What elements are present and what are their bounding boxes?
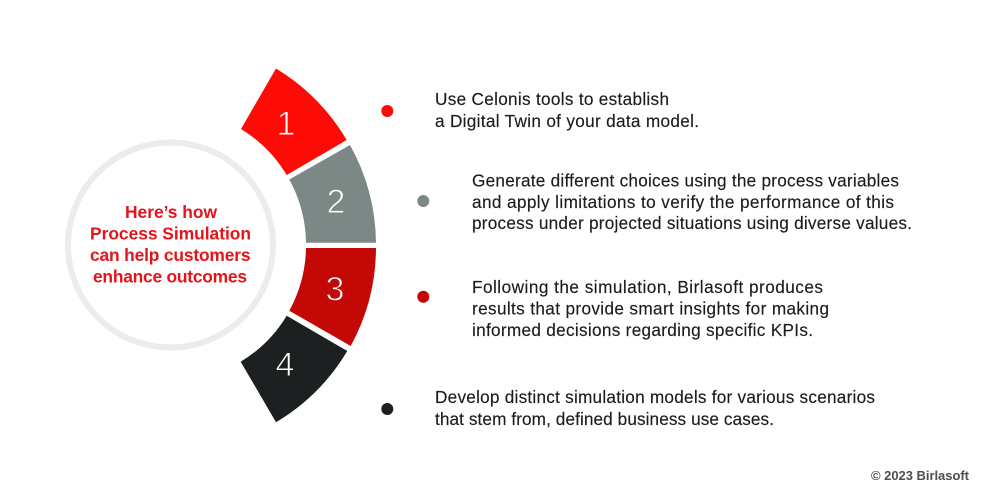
text: Following the simulation, Birlasoft produces — [472, 277, 823, 297]
step 4 — [381, 387, 875, 429]
step 1 — [381, 89, 699, 131]
text: process under projected situations using diverse values. — [472, 213, 912, 233]
heading: enhance outcomes — [93, 267, 247, 287]
text: and apply limitations to verify the performance of this — [472, 192, 894, 212]
arc segment 3: 3 — [326, 271, 344, 309]
arc segment 1: 1 — [277, 105, 295, 143]
bullet — [381, 403, 393, 415]
heading: Process Simulation — [90, 224, 251, 244]
arc segment 2 — [289, 145, 376, 243]
bullet — [381, 105, 393, 117]
circle outline — [68, 142, 273, 348]
text — [435, 89, 699, 131]
bullet — [417, 195, 429, 207]
copyright footer: © 2023 Birlasoft — [871, 468, 970, 483]
text: that stem from, defined business use cases. — [435, 409, 774, 429]
heading: can help customers — [90, 245, 250, 265]
text: Develop distinct simulation models for various scenarios — [435, 387, 875, 407]
text: Use Celonis tools to establish — [435, 89, 669, 109]
arc segment 4 — [241, 316, 347, 422]
text: a Digital Twin of your data model. — [435, 111, 699, 131]
text: informed decisions regarding specific KPIs. — [472, 320, 813, 340]
text — [472, 171, 912, 233]
text — [435, 387, 875, 429]
arc segment 2: 2 — [327, 183, 345, 221]
text: results that provide smart insights for making — [472, 298, 829, 318]
arc segment 1 — [241, 68, 347, 175]
text: Generate different choices using the process variables — [472, 171, 899, 191]
heading — [90, 202, 251, 287]
step 3 — [417, 277, 829, 340]
arc segment 3 — [289, 248, 376, 346]
step 2 — [417, 171, 912, 233]
central circle with heading — [68, 142, 273, 348]
bullet — [417, 291, 429, 303]
heading: Here’s how — [125, 202, 217, 222]
arc segment 4: 4 — [276, 346, 294, 384]
text — [472, 277, 829, 340]
